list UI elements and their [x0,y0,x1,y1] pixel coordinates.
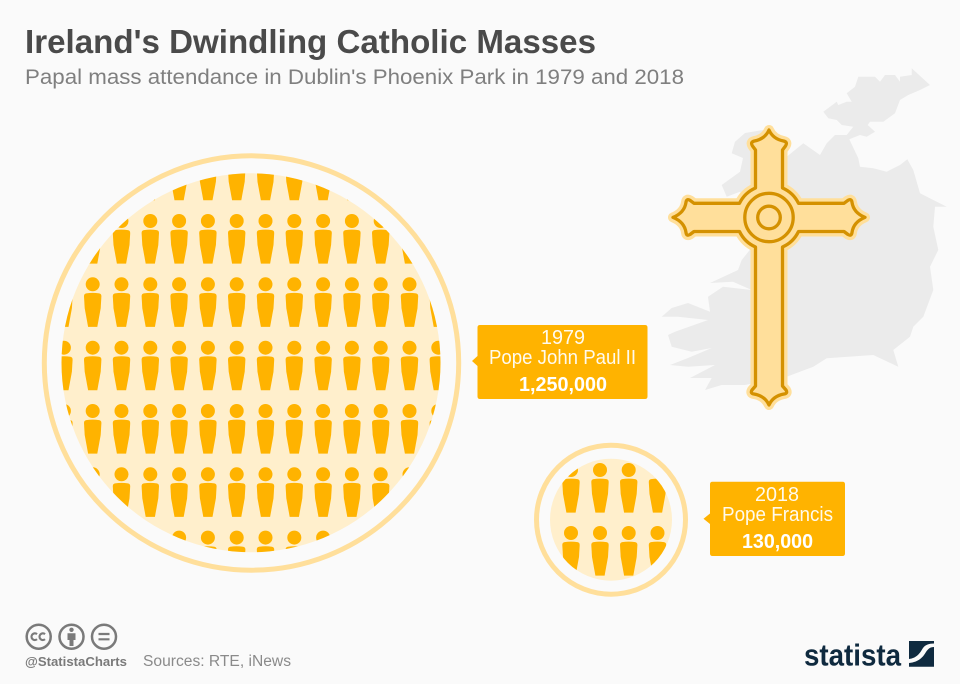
callout: 2018: 2018 [755,484,799,506]
panel: 1979 crowd circle [44,151,459,580]
callout: 1979: 1,250,000 [519,374,607,396]
callout: 2018: 130,000 [742,531,813,553]
icon: cross [673,130,865,405]
logo: statista: statista [804,638,902,673]
map: Republic of Ireland [662,68,947,390]
callout: 1979 [472,325,648,399]
callout: 1979: Pope John Paul II [489,347,636,369]
handle: @StatistaCharts [25,654,127,669]
callout: 2018: Pope Francis [722,504,833,526]
panel: 2018 crowd circle [536,445,686,594]
subtitle: Papal mass attendance in Dublin's Phoenix Park in 1979 and 2018 [25,65,684,89]
icon: cc license [27,625,116,649]
title: Ireland's Dwindling Catholic Masses [25,23,596,60]
sources: Sources: RTE, iNews [143,653,291,670]
callout: 1979: 1979 [541,327,585,349]
callout: 2018 [704,482,845,556]
